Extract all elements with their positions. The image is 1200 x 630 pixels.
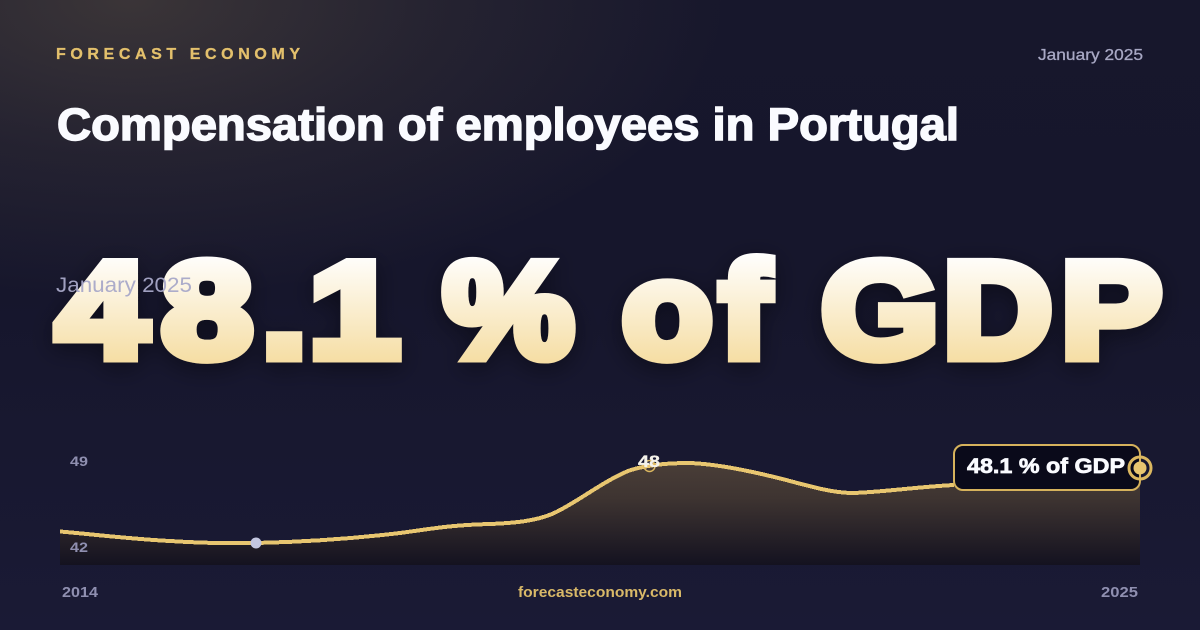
brand label: FORECAST ECONOMY <box>56 46 300 63</box>
date top right: January 2025 <box>1038 47 1143 64</box>
source website: forecasteconomy.com <box>518 584 682 601</box>
title: Compensation of employees in Portugal <box>57 99 959 150</box>
high point label: 48 <box>638 452 660 471</box>
current value callout <box>954 445 1140 490</box>
x axis start year: 2014 <box>62 584 99 601</box>
current value callout: 48.1 % of GDP <box>967 455 1125 478</box>
big value: of <box>622 235 770 387</box>
big value: GDP <box>821 235 1162 386</box>
current value marker <box>1129 457 1151 479</box>
big value <box>57 234 1162 387</box>
x axis end year: 2025 <box>1101 584 1138 601</box>
big value: 48.1 <box>57 234 400 386</box>
high point marker <box>644 460 655 472</box>
area chart <box>60 452 1140 565</box>
overlapping date label: January 2025 <box>56 274 192 297</box>
big value: % <box>443 234 574 386</box>
chart line <box>60 463 954 543</box>
y axis label 49: 49 <box>70 453 88 469</box>
low point marker <box>250 538 262 548</box>
y axis label 42: 42 <box>70 539 88 555</box>
chart area fill <box>60 463 1140 565</box>
